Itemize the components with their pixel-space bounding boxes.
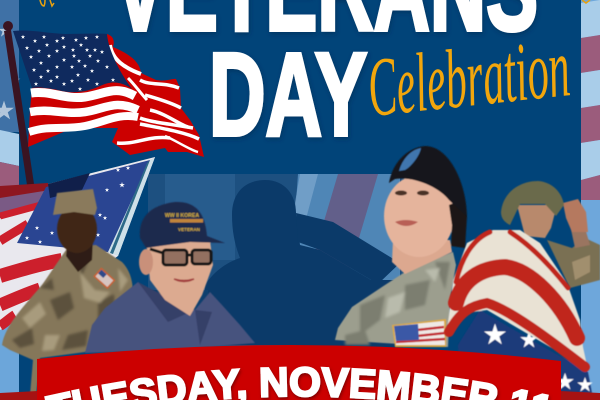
date banner: [37, 345, 561, 400]
cap: [53, 189, 97, 215]
flag stars: [21, 35, 115, 91]
camouflage patches: [12, 258, 128, 351]
forearm: [570, 225, 590, 248]
smile: [174, 279, 194, 282]
background photo panel with silhouette: [148, 174, 403, 350]
helmet: [501, 181, 564, 225]
left border flag stripes: [0, 0, 20, 395]
soldier: saluting man with helmet: [501, 181, 600, 288]
waving flag: top left: [3, 21, 204, 185]
flag canton: [13, 30, 132, 92]
uniform: [2, 245, 133, 395]
veteran cap: [140, 202, 225, 248]
camouflage patches: [345, 262, 450, 345]
sleeve: [547, 238, 600, 288]
soldier: man in camouflage with crossed arms: [2, 189, 133, 395]
side ribbons of date banner: [0, 391, 600, 400]
soldier: woman in beret: [335, 146, 467, 347]
face: [57, 205, 97, 253]
red stripes: [449, 232, 585, 367]
face: [517, 205, 557, 238]
cap lettering: WW II KOREA: [165, 213, 199, 219]
silhouette of saluting soldier: [205, 180, 378, 345]
beret: [389, 146, 467, 217]
shirt: [85, 282, 255, 353]
right border flag stripes: [581, 0, 600, 400]
uniform: [335, 252, 456, 347]
white folds: [447, 230, 588, 370]
face: [384, 175, 454, 257]
hand: [563, 199, 588, 232]
neck: [66, 238, 93, 272]
flag red field: [28, 34, 204, 157]
cap lettering: VETERAN: [178, 227, 201, 232]
blue star field: [458, 310, 592, 393]
decorative top script remnants: [40, 0, 590, 6]
uniform flag patch: [392, 319, 446, 347]
neck and face: [146, 240, 213, 316]
title: Celebration script: Celebration: [363, 22, 574, 135]
flag drape on soldier: [447, 230, 593, 393]
flag white stripes: [29, 45, 199, 152]
lower left flag behind soldier: [0, 157, 155, 330]
shoulder flag patch: [93, 268, 115, 289]
title: DAY: DAY: [209, 29, 367, 161]
glasses: [150, 249, 211, 265]
flagpole: [3, 21, 34, 185]
hair: [449, 203, 467, 248]
veteran: elderly man with cap and glasses: [85, 202, 255, 353]
beret badge: [399, 148, 421, 171]
cap lettering: [165, 213, 203, 232]
neck: [392, 240, 452, 274]
